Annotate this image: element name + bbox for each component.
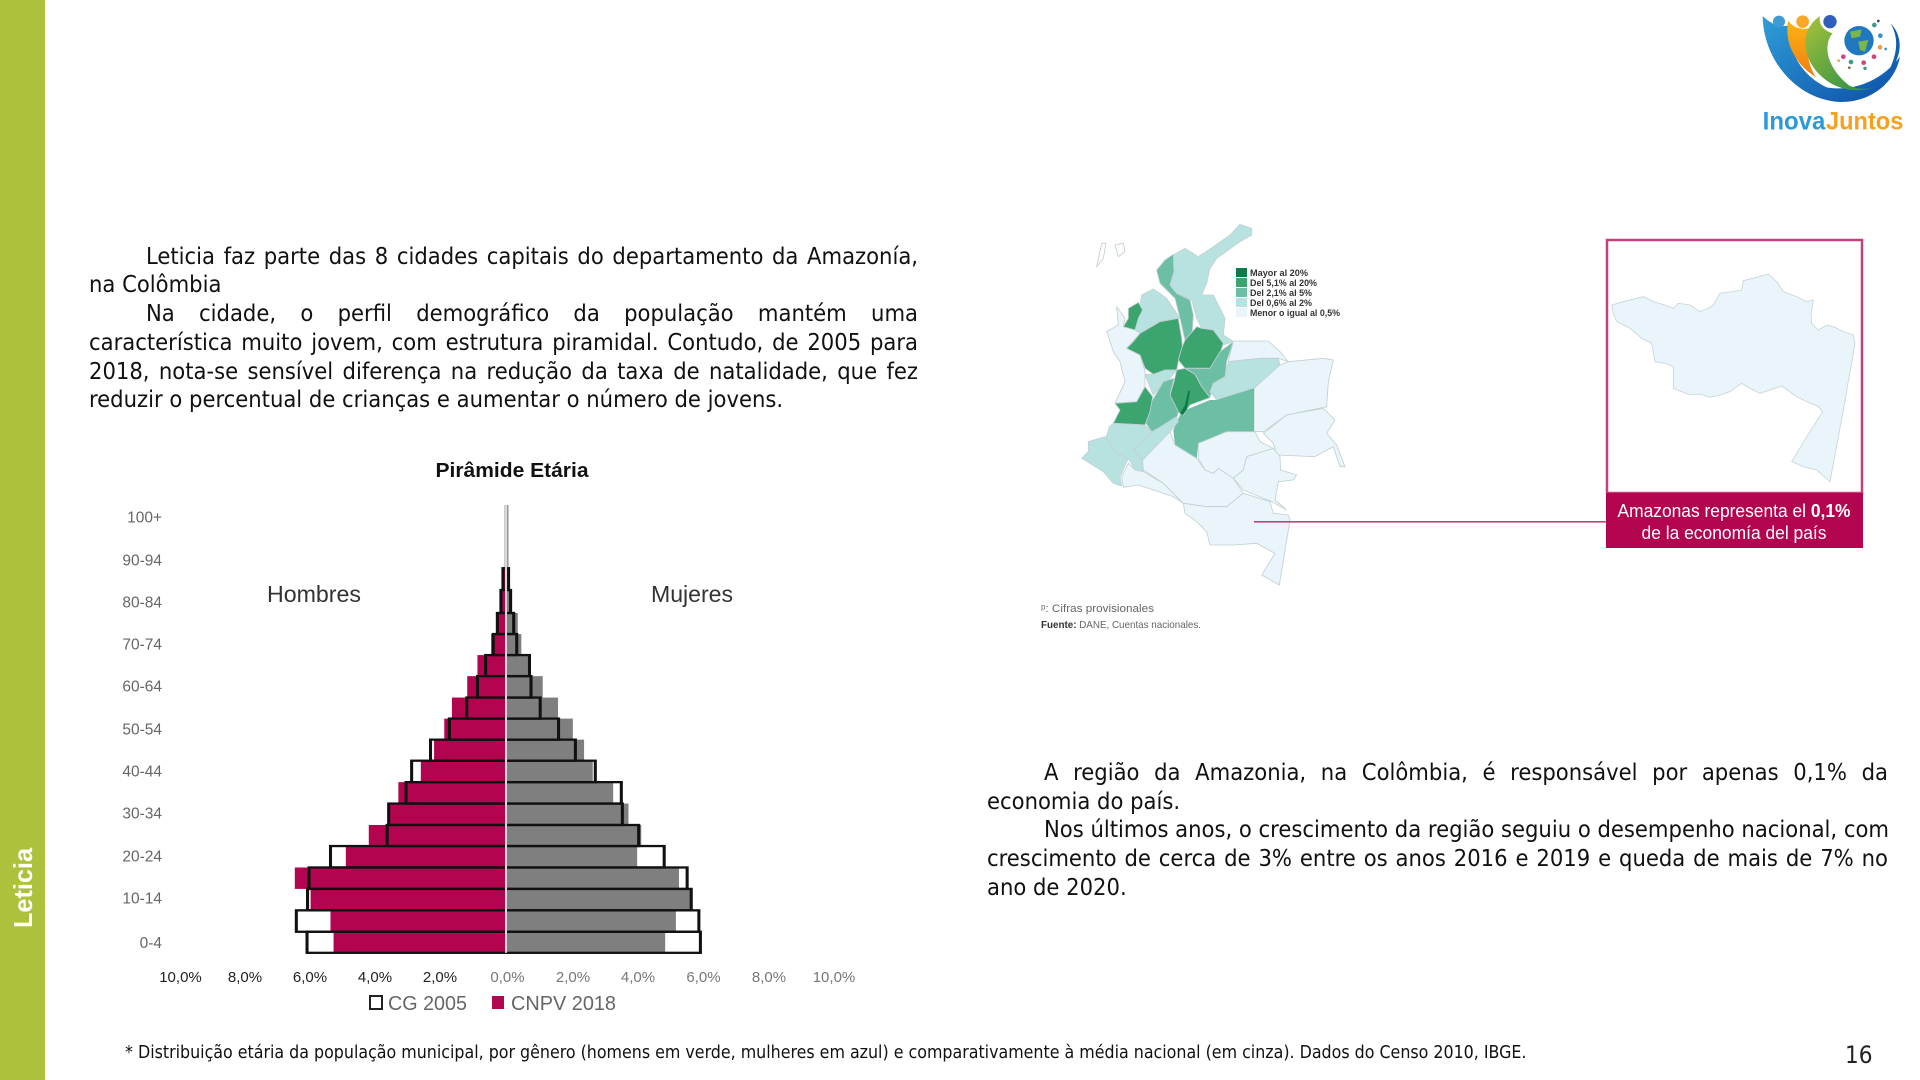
percent axis labels: 6,0% bbox=[686, 969, 721, 986]
age axis labels: 100+ bbox=[127, 510, 162, 526]
text block: demographics: 2018, nota-se sensível diferença na redução da taxa de natalidade, que fez bbox=[89, 357, 918, 385]
logo: InovaJuntos: Inova bbox=[1763, 108, 1826, 136]
text block: economy: ano de 2020. bbox=[987, 873, 1127, 901]
age axis labels: 30-34 bbox=[122, 806, 162, 822]
age axis labels: 50-54 bbox=[122, 722, 162, 738]
age axis labels: 60-64 bbox=[122, 678, 162, 696]
map legend: Mayor al 20% bbox=[1250, 268, 1308, 278]
age axis labels: 70-74 bbox=[122, 636, 162, 654]
map regions bbox=[1082, 224, 1345, 585]
text block: economy bbox=[987, 758, 1889, 901]
CG 2005 outlines bbox=[296, 568, 700, 953]
percent axis labels bbox=[159, 969, 855, 986]
map legend bbox=[1236, 268, 1340, 318]
text block: demographics: reduzir o percentual de crianças e aumentar o número de jovens. bbox=[89, 385, 783, 413]
age axis labels: 40-44 bbox=[122, 764, 162, 780]
percent axis labels: 8,0% bbox=[228, 969, 262, 986]
age axis labels: 90-94 bbox=[122, 552, 162, 570]
age axis labels: 80-84 bbox=[122, 594, 162, 612]
legend: CG 2005 bbox=[388, 993, 467, 1015]
map legend: Del 5,1% al 20% bbox=[1250, 278, 1317, 288]
percent axis labels: 2,0% bbox=[423, 969, 457, 986]
text block: economy: economia do país. bbox=[987, 787, 1180, 815]
callout text: Amazonas representa el 0,1% bbox=[1618, 501, 1850, 521]
sidebar label: Leticia bbox=[8, 847, 38, 928]
map source note: Fuente: DANE, Cuentas nacionales. bbox=[1041, 619, 1201, 631]
footnote: * Distribuição etária da população municipal, por gênero (homens em verde, mulheres em azul) e comparativamente à média nacional (em cinza). Dados do Censo 2010, IBGE. bbox=[125, 1042, 1526, 1062]
age axis labels: 10-14 bbox=[122, 890, 162, 908]
map legend: Del 2,1% al 5% bbox=[1250, 288, 1312, 298]
text block: demographics: Na cidade, o perfil demográfico da população mantém uma bbox=[146, 299, 918, 327]
percent axis labels: 10,0% bbox=[813, 969, 855, 986]
bars bbox=[295, 505, 700, 953]
page number: 16 bbox=[1845, 1041, 1872, 1069]
icon: Amazonas shape bbox=[1612, 274, 1855, 482]
legend bbox=[370, 993, 616, 1015]
age axis labels: 0-4 bbox=[140, 935, 162, 952]
text block: economy: Nos últimos anos, o crescimento da região seguiu o desempenho nacional, com bbox=[1044, 815, 1889, 843]
map legend: Del 0,6% al 2% bbox=[1250, 298, 1312, 308]
logo: InovaJuntos: Juntos bbox=[1826, 108, 1903, 136]
text block: demographics: característica muito jovem, com estrutura piramidal. Contudo, de 2005 para bbox=[89, 328, 918, 356]
percent axis labels: 4,0% bbox=[358, 969, 392, 986]
text block: demographics: Leticia faz parte das 8 cidades capitais do departamento da Amazonía, bbox=[146, 242, 918, 270]
map source note bbox=[1041, 603, 1201, 631]
text block: demographics: na Colômbia bbox=[89, 270, 221, 298]
CNPV 2018 female bars bbox=[504, 505, 691, 953]
percent axis labels: 8,0% bbox=[752, 969, 786, 986]
map source note: ᵖ: Cifras provisionales bbox=[1041, 603, 1155, 615]
age axis labels bbox=[122, 510, 162, 952]
text block: demographics bbox=[89, 242, 918, 413]
percent axis labels: 2,0% bbox=[556, 969, 590, 986]
text block: economy: A região da Amazonia, na Colômbia, é responsável por apenas 0,1% da bbox=[1044, 758, 1888, 786]
logo: InovaJuntos bbox=[1762, 15, 1903, 136]
percent axis labels: 4,0% bbox=[621, 969, 655, 986]
callout text: de la economía del país bbox=[1642, 523, 1826, 543]
percent axis labels: 6,0% bbox=[293, 969, 327, 986]
label: Mujeres: Mujeres bbox=[651, 581, 733, 607]
text block: economy: crescimento de cerca de 3% entre os anos 2016 e 2019 e queda de mais de 7% no bbox=[987, 844, 1888, 872]
connector line bbox=[1254, 521, 1607, 523]
age axis labels: 20-24 bbox=[122, 848, 162, 866]
population pyramid chart bbox=[122, 459, 855, 1015]
percent axis labels: 10,0% bbox=[159, 969, 202, 986]
map panel: Colombia bbox=[1041, 224, 1864, 631]
chart title: Pirâmide Etária bbox=[436, 459, 589, 482]
sidebar bbox=[0, 0, 45, 1080]
CNPV 2018 male bars bbox=[295, 568, 506, 953]
label: Hombres: Hombres bbox=[267, 581, 361, 607]
callout: Amazonas inset bbox=[1606, 240, 1863, 548]
map legend: Menor o igual al 0,5% bbox=[1250, 308, 1340, 318]
legend: CNPV 2018 bbox=[511, 993, 616, 1015]
percent axis labels: 0,0% bbox=[490, 969, 525, 986]
callout text bbox=[1618, 501, 1850, 543]
